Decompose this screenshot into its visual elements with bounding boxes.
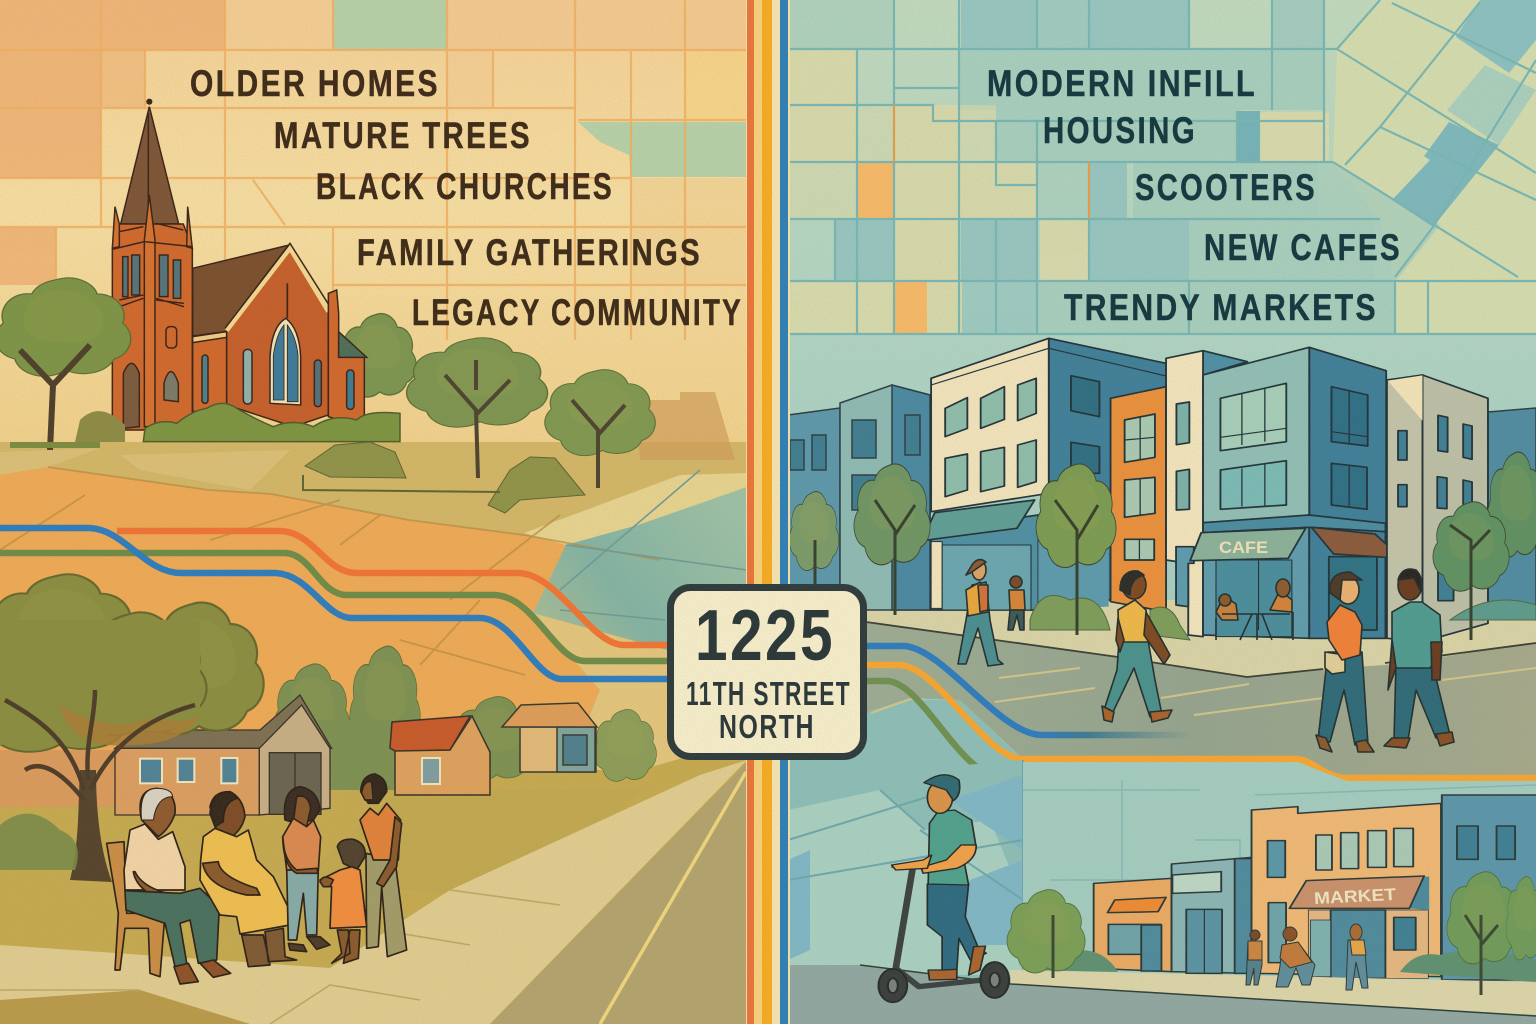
cafe patrons and table	[1216, 579, 1293, 640]
arched window	[270, 318, 301, 405]
neighborhood labels: left: FAMILY GATHERINGS	[357, 232, 702, 273]
lower left teal map	[788, 700, 1023, 985]
road center line	[600, 772, 746, 1024]
right panel labels: TRENDY MARKETS	[1064, 287, 1378, 328]
street surface	[788, 600, 1536, 985]
lawn edge shrub	[75, 411, 125, 442]
tree: left of church	[0, 278, 131, 450]
elder man on chair	[107, 788, 231, 984]
sidewalk	[0, 760, 747, 1024]
street trees and shrubs	[789, 452, 1536, 640]
central corridor stripes	[746, 0, 790, 1024]
left background wash	[0, 0, 748, 1024]
tree: right	[545, 370, 655, 488]
market street shoppers	[1246, 924, 1368, 990]
house: small distant	[502, 703, 597, 772]
family group	[107, 774, 407, 984]
house: main	[0, 695, 332, 815]
rider	[892, 775, 986, 980]
tree: middle	[407, 338, 548, 478]
woman in yellow dress	[200, 792, 297, 967]
lower left ground	[0, 740, 747, 1024]
cream tower	[1166, 351, 1247, 637]
market street row	[1094, 795, 1536, 980]
right background wash	[788, 0, 1536, 1024]
pedestrian: far walker	[958, 560, 1003, 666]
foundation shrubs	[143, 403, 400, 442]
cafe awning sign: CAFE	[1219, 538, 1268, 557]
street sign	[670, 588, 864, 756]
pedestrians	[958, 560, 1454, 752]
pedestrian: teal shirt	[1384, 569, 1454, 748]
right panel labels: MODERN INFILL	[987, 63, 1257, 104]
market street trees	[1007, 872, 1536, 995]
right panel labels: SCOOTERS	[1135, 167, 1317, 208]
road	[490, 762, 747, 1024]
orange shop	[1094, 878, 1172, 972]
background trees behind houses	[274, 646, 656, 790]
grey blue shop	[1172, 857, 1252, 973]
pedestrian: distant	[1008, 576, 1025, 630]
neighborhood labels: left: MATURE TREES	[274, 115, 532, 156]
market awning sign: MARKET	[1314, 885, 1397, 908]
pedestrian: orange shirt	[1316, 572, 1374, 752]
infill housing block	[922, 338, 1488, 642]
church	[112, 99, 400, 442]
right panel labels: NEW CAFES	[1204, 227, 1402, 268]
neighborhood labels: left: BLACK CHURCHES	[316, 166, 614, 207]
girl in orange top	[283, 787, 330, 952]
lower sidewalk and road	[788, 965, 1536, 1024]
nave roof	[193, 245, 289, 336]
panel: left historic neighborhood	[0, 0, 748, 1024]
diagonal street cells	[1333, 0, 1536, 334]
neighborhood labels: left: OLDER HOMES	[190, 63, 440, 104]
side wall	[193, 334, 227, 412]
panel: right redeveloped neighborhood	[788, 0, 1536, 1024]
pedestrian: yellow shirt	[1102, 571, 1172, 722]
scooter	[879, 866, 1009, 1002]
lower right map shards	[788, 760, 1536, 980]
distant buildings	[635, 392, 735, 460]
sign direction: NORTH	[719, 708, 815, 745]
pale side building	[1387, 375, 1488, 642]
corner building	[1190, 347, 1402, 638]
tree: behind church right	[340, 314, 416, 397]
child in orange dress	[320, 839, 367, 963]
building right back	[1488, 408, 1536, 610]
shrubs on the lawn	[303, 442, 585, 513]
side chapel	[328, 290, 364, 427]
right panel labels	[987, 63, 1402, 328]
street map ground	[0, 442, 748, 790]
spire	[121, 99, 179, 224]
right panel labels: HOUSING	[1043, 110, 1197, 151]
shrubs left	[0, 814, 78, 870]
market building	[1252, 803, 1441, 978]
cream and blue apartment	[922, 338, 1166, 610]
orange building	[1111, 387, 1166, 612]
blue storefront	[1442, 795, 1536, 980]
tower	[112, 195, 192, 430]
sidewalk	[866, 600, 1536, 677]
tree: large shade tree	[0, 574, 264, 882]
adult in orange shirt	[360, 774, 407, 957]
sign number: 1225	[695, 596, 835, 676]
transit lines: right	[866, 646, 1536, 778]
house: red roof	[390, 716, 490, 795]
neighborhood labels: left	[190, 63, 743, 333]
neighborhood labels: left: LEGACY COMMUNITY	[412, 292, 743, 333]
nave gable	[227, 250, 328, 427]
sign street name: 11TH STREET	[686, 675, 851, 712]
transit lines: left	[0, 528, 670, 679]
buildings left back	[788, 385, 930, 610]
man on electric scooter	[879, 775, 1009, 1002]
